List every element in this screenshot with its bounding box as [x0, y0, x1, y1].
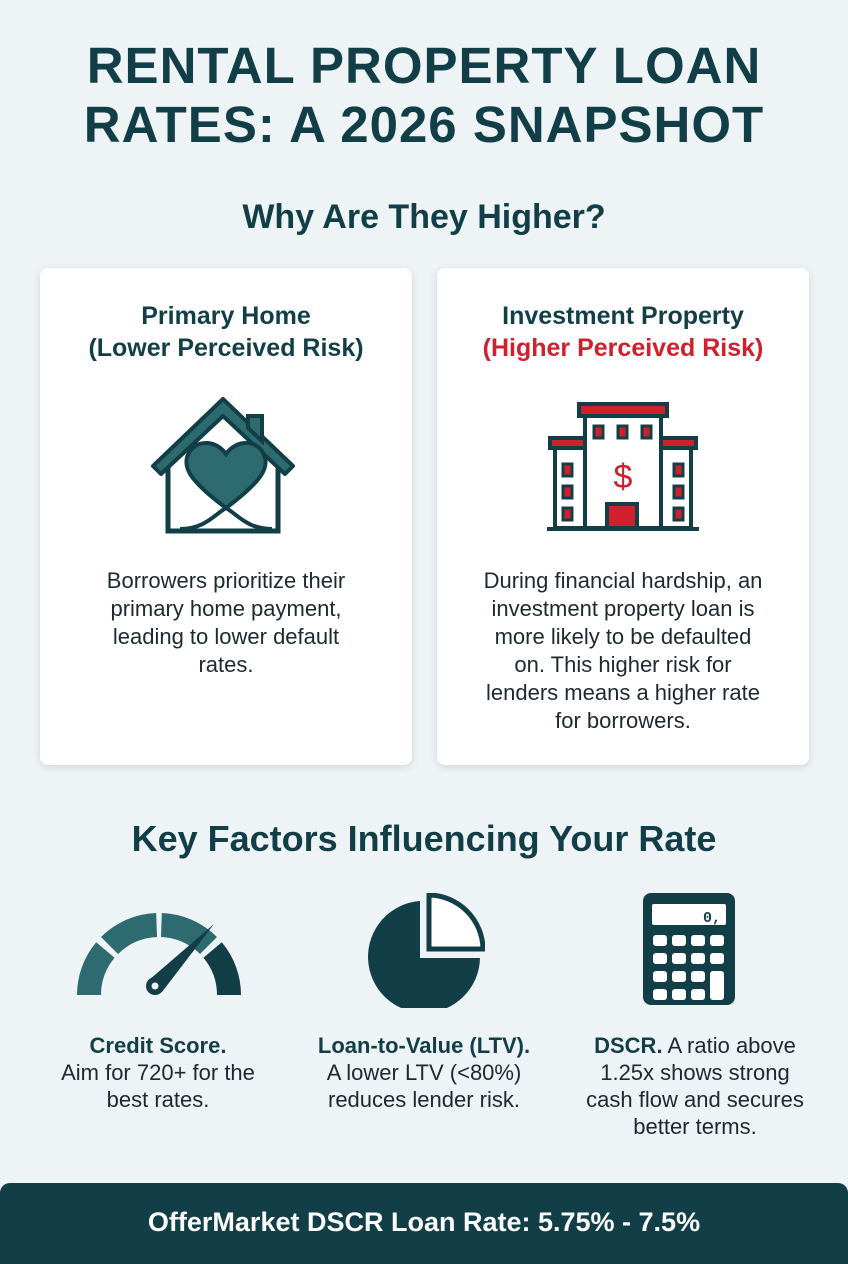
factor: LTV: reduces lender risk. — [328, 1087, 520, 1112]
heading: why higher: Why Are They Higher? — [242, 198, 606, 236]
text investment — [484, 568, 762, 733]
icon: pie chart — [368, 893, 485, 1008]
icon: building — [547, 402, 699, 531]
factor: credit score: Credit Score. — [90, 1033, 226, 1058]
footer bar: OfferMarket DSCR Loan Rate: 5.75% - 7.5% — [148, 1207, 700, 1237]
text primary: leading to lower default — [113, 624, 339, 649]
factor: DSCR — [586, 1033, 804, 1139]
icon: calculator: 0, — [703, 910, 721, 927]
factor: credit score: Aim for 720+ for the — [61, 1060, 255, 1085]
icon: building: $ — [614, 458, 633, 496]
factor: credit score — [61, 1033, 255, 1112]
icon: house heart — [150, 396, 296, 534]
card heading primary: Primary Home — [141, 302, 311, 330]
factor: DSCR: cash flow and secures — [586, 1087, 804, 1112]
text primary — [107, 568, 345, 677]
factor: credit score: best rates. — [107, 1087, 209, 1112]
text investment: investment property loan is — [492, 596, 754, 621]
title — [84, 37, 764, 153]
card heading investment: (Higher Perceived Risk) — [483, 334, 763, 362]
text investment: lenders means a higher rate — [486, 680, 760, 705]
footer bar — [0, 1183, 848, 1264]
panel: investment property — [437, 268, 809, 765]
icon: gauge — [77, 913, 241, 995]
card heading investment: Investment Property — [502, 302, 744, 330]
card heading primary — [88, 302, 364, 362]
factor: DSCR: 1.25x shows strong — [600, 1060, 790, 1085]
card heading primary: (Lower Perceived Risk) — [88, 334, 364, 362]
factor: DSCR: better terms. — [633, 1114, 757, 1139]
factor: LTV: A lower LTV (<80%) — [327, 1060, 521, 1085]
factor: LTV — [318, 1033, 530, 1112]
card heading investment — [483, 302, 763, 362]
text primary: Borrowers prioritize their — [107, 568, 345, 593]
text investment: more likely to be defaulted — [495, 624, 751, 649]
panel: primary home — [40, 268, 412, 765]
icon: calculator — [643, 893, 735, 1005]
title: RATES: A 2026 SNAPSHOT — [84, 96, 764, 153]
heading: key factors: Key Factors Influencing Your Rate — [132, 818, 716, 859]
text investment: on. This higher risk for — [514, 652, 732, 677]
title: RENTAL PROPERTY LOAN — [87, 37, 761, 94]
text investment: for borrowers. — [555, 708, 691, 733]
text primary: primary home payment, — [110, 596, 342, 621]
text investment: During financial hardship, an — [484, 568, 762, 593]
factor: DSCR: DSCR. A ratio above — [594, 1033, 796, 1058]
text primary: rates. — [198, 652, 254, 677]
factor: LTV: Loan-to-Value (LTV). — [318, 1033, 530, 1058]
